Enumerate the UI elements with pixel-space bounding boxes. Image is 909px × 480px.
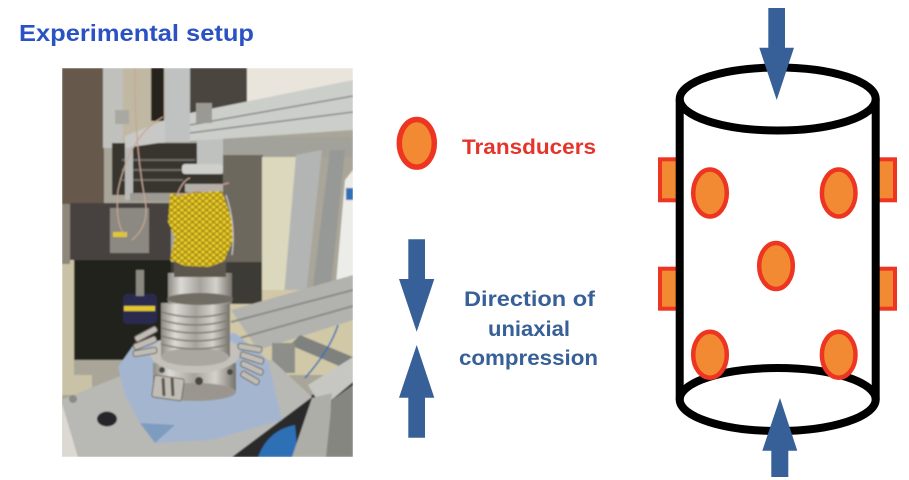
legend label: direction of uniaxial compression: compression: [459, 347, 598, 370]
legend label: direction of uniaxial compression: Direction of: [464, 288, 596, 311]
photo: dark steel block: [62, 203, 171, 390]
transducer: lower left: [693, 332, 727, 378]
legend: downward compression arrow: [399, 239, 434, 332]
legend label: direction of uniaxial compression: [459, 288, 598, 370]
photo: metal table plate: [61, 357, 353, 457]
legend: transducer symbol: [399, 120, 434, 167]
photo: background machinery, upper part: [62, 68, 353, 295]
side transducer: lower right: [876, 269, 895, 309]
photo: blue cloth: [118, 333, 282, 443]
legend label: transducers: Transducers: [462, 136, 596, 159]
photo: upper aluminium beam: [115, 80, 353, 148]
side transducer: upper right: [876, 159, 895, 200]
photo: connector clusters: [133, 326, 264, 401]
legend: upward compression arrow: [399, 345, 434, 438]
transducer: upper left: [693, 170, 727, 216]
photo: load cell: [182, 164, 223, 194]
cylinder outline: [680, 68, 876, 431]
transducer: upper right: [822, 170, 856, 216]
photo: sensor cables: [117, 68, 233, 255]
diagram: cylinder with transducers: [660, 68, 895, 431]
photo: experimental apparatus: [61, 68, 353, 457]
side transducer: upper left: [660, 159, 680, 200]
transducer: lower right: [822, 332, 856, 378]
transducer: centre: [759, 243, 793, 289]
photo: yellow mesh sleeve: [168, 191, 233, 267]
diagram: top compression arrow: [759, 8, 794, 100]
diagram: bottom compression arrow: [762, 398, 797, 477]
legend label: direction of uniaxial compression: uniaxial: [488, 318, 570, 341]
photo: pressure vessel: [150, 262, 240, 401]
photo: canister with yellow label: [123, 270, 157, 324]
side transducer: lower left: [660, 269, 680, 309]
title: Experimental setup: [19, 20, 254, 46]
photo: floor and right beams: [62, 262, 353, 395]
